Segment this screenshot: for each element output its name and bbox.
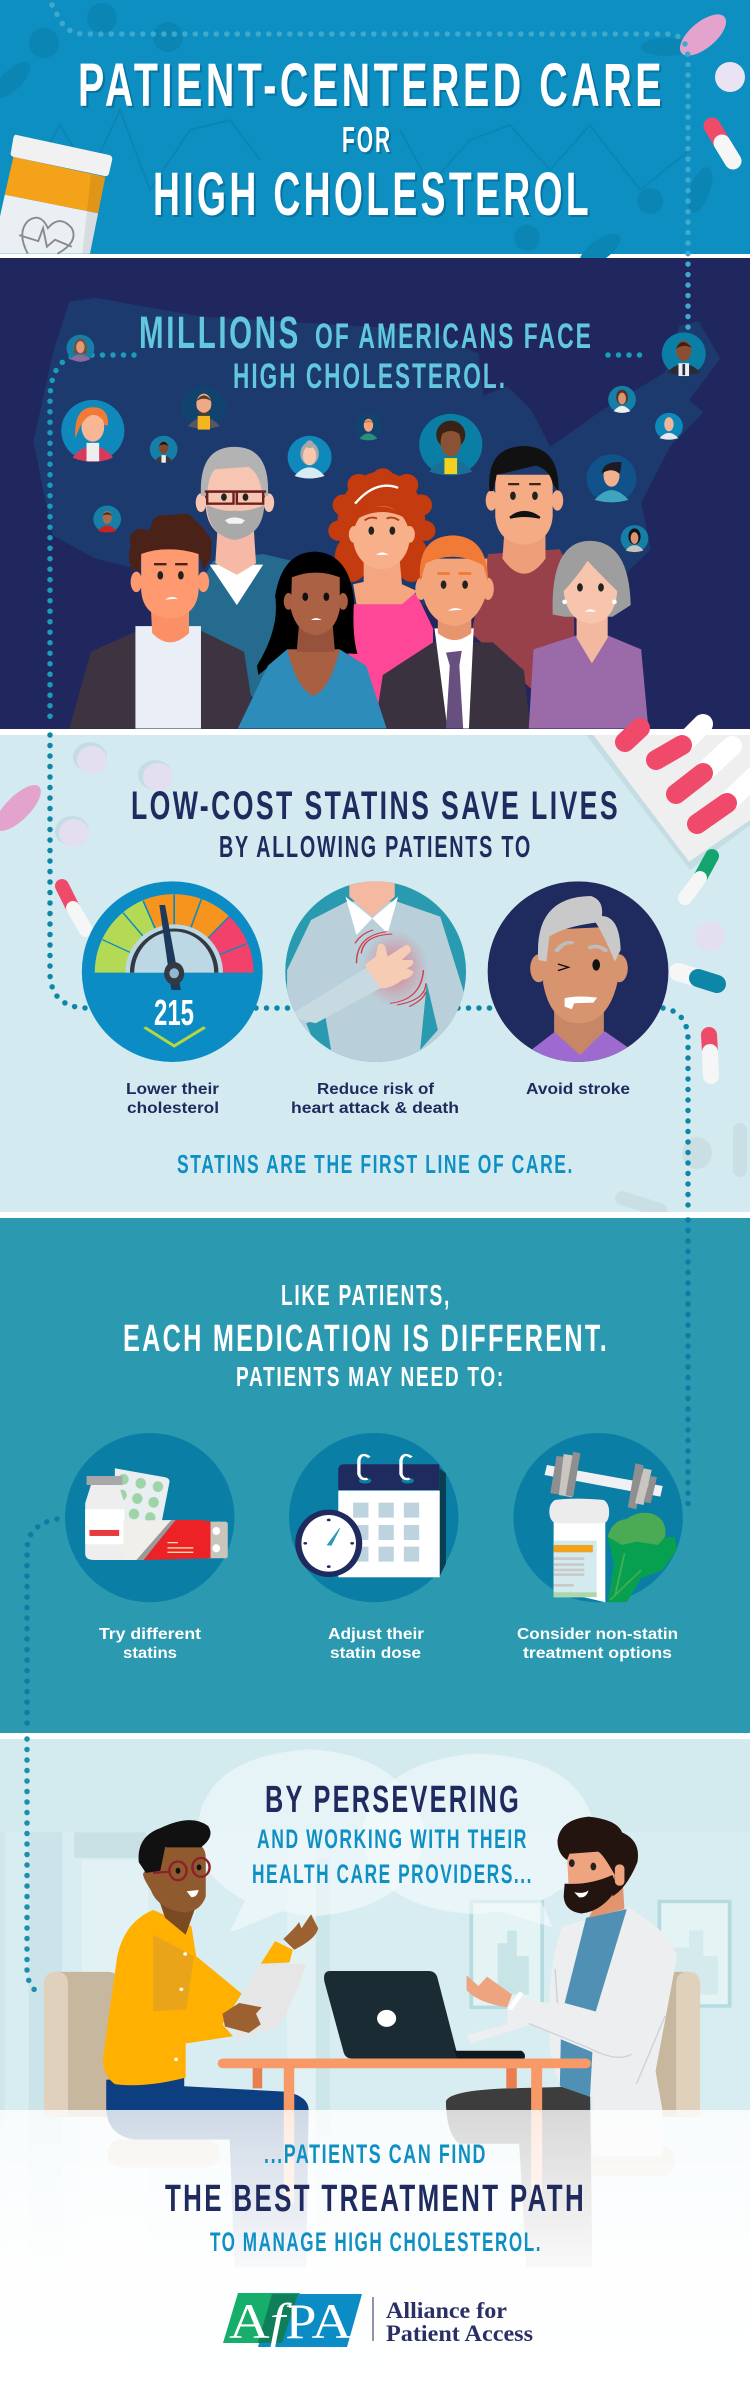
icon: pill bottle — [0, 135, 112, 254]
heading: best treatment path: TO MANAGE HIGH CHOLESTEROL. — [210, 2227, 542, 2257]
dotted path — [27, 1220, 688, 1733]
icon: red capsule — [712, 126, 733, 161]
logo: Alliance for Patient Access — [223, 2293, 533, 2349]
person: patient — [103, 1820, 318, 2268]
white fade panel — [0, 2110, 750, 2399]
label: lower cholesterol: cholesterol — [127, 1100, 219, 1117]
scene illustration — [0, 1749, 750, 2285]
dotted path — [27, 1739, 42, 1994]
panel: low-cost statins — [0, 724, 750, 1212]
label: adjust dose: Adjust their — [328, 1626, 424, 1643]
heading: millions: MILLIONS — [139, 307, 301, 358]
icons row — [82, 881, 668, 1063]
logo: Alliance for Patient Access: AfPA — [229, 2293, 352, 2349]
heading: by persevering: BY PERSEVERING — [265, 1779, 521, 1821]
avatars — [61, 332, 706, 552]
heading: best treatment path: ...PATIENTS CAN FIND — [264, 2139, 487, 2169]
heading: low-cost statins — [131, 784, 620, 864]
icon: heart attack — [285, 881, 466, 1063]
heading: by persevering — [252, 1779, 533, 1889]
title — [78, 51, 665, 228]
person: man with curly hair — [69, 513, 256, 729]
label: reduce risk: heart attack & death — [291, 1100, 459, 1117]
heading: each medication: LIKE PATIENTS, — [281, 1280, 451, 1312]
callout: first line of care: STATINS ARE THE FIRST LINE OF CARE. — [177, 1149, 574, 1179]
group of people — [69, 446, 648, 729]
heading: each medication: PATIENTS MAY NEED TO: — [236, 1361, 505, 1392]
label: adjust dose: statin dose — [330, 1645, 421, 1662]
heading: low-cost statins: BY ALLOWING PATIENTS TO — [219, 829, 532, 864]
heading: millions: HIGH CHOLESTEROL. — [233, 357, 507, 396]
chairs — [44, 1972, 700, 2176]
panel: header — [0, 0, 750, 272]
label: avoid stroke: Avoid stroke — [526, 1081, 630, 1098]
icon: different statins — [65, 1433, 234, 1602]
decorative pills — [0, 724, 750, 1210]
panel: millions of Americans — [0, 5, 750, 729]
dotted path — [50, 735, 688, 1212]
label: non-statin options — [517, 1626, 678, 1662]
label: non-statin options: treatment options — [523, 1645, 672, 1662]
person: woman with gray hair — [529, 541, 648, 729]
icons row — [65, 1433, 683, 1602]
label: try different statins — [99, 1626, 201, 1662]
label: adjust dose — [328, 1626, 424, 1662]
logo: Alliance for Patient Access: Patient Access — [386, 2321, 533, 2346]
room background — [0, 1832, 750, 2285]
label: lower cholesterol — [126, 1081, 219, 1117]
person: doctor — [446, 1817, 677, 2268]
icon: pink tablet — [673, 7, 733, 63]
label: try different statins: Try different — [99, 1626, 201, 1643]
icon: non-statin options — [513, 1433, 683, 1602]
person: woman with red hair — [328, 468, 435, 729]
panel: persevering scene — [0, 1739, 750, 2399]
icon: stroke patient — [488, 881, 668, 1063]
heading: by persevering: HEALTH CARE PROVIDERS... — [252, 1859, 533, 1889]
logo: Alliance for Patient Access: Alliance for — [386, 2298, 507, 2323]
title: FOR — [342, 119, 392, 160]
person: man with glasses — [182, 447, 297, 698]
icon: calendar and clock — [289, 1433, 458, 1602]
heading: best treatment path — [165, 2139, 586, 2257]
heading: millions: OF AMERICANS FACE — [315, 317, 593, 356]
dotted path — [50, 5, 688, 722]
speech bubbles — [197, 1749, 596, 1933]
icon: cholesterol gauge — [82, 881, 263, 1062]
table and laptop — [218, 1971, 591, 2204]
heading: by persevering: AND WORKING WITH THEIR — [257, 1824, 528, 1854]
label: lower cholesterol: Lower their — [126, 1081, 219, 1098]
label: reduce risk — [291, 1081, 459, 1117]
person: woman with black hair — [238, 552, 387, 729]
gauge value: 215 — [154, 992, 194, 1033]
heading: millions — [139, 307, 593, 396]
icon: white round pill — [715, 62, 745, 92]
label: non-statin options: Consider non-statin — [517, 1626, 678, 1643]
person: man in suit — [375, 535, 530, 729]
person: man with mustache — [471, 446, 574, 689]
label: try different statins: statins — [123, 1645, 177, 1662]
heading: each medication — [123, 1280, 609, 1392]
US map — [33, 298, 720, 605]
label: reduce risk: Reduce risk of — [317, 1081, 435, 1098]
panel: each medication is different — [0, 1218, 750, 1733]
